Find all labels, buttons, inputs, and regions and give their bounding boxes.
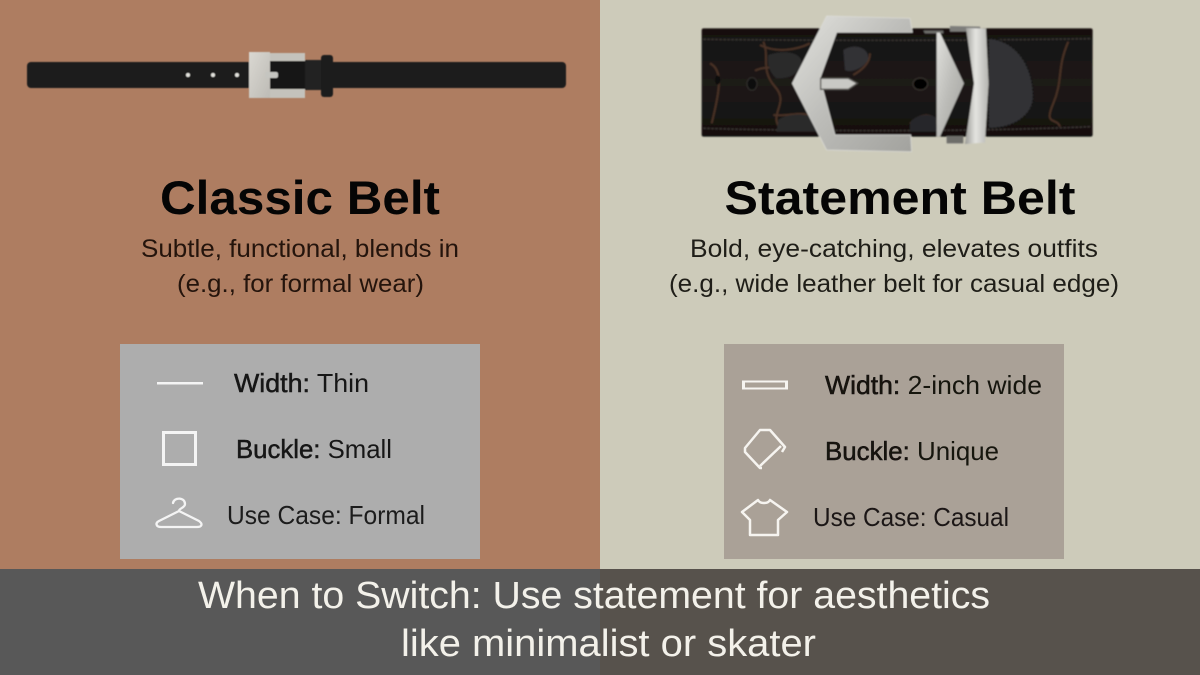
text: statement belt description: Bold, eye-catching, elevates outfits — [690, 235, 1098, 263]
text: when to switch: When to Switch: Use statement for aesthetics — [198, 575, 990, 617]
icon: thin line — [157, 382, 203, 384]
panel: classic belt attributes — [120, 344, 480, 559]
icon: wide bar — [744, 381, 786, 389]
text: statement belt description: (e.g., wide leather belt for casual edge) — [669, 270, 1119, 298]
text: statement belt description — [669, 235, 1119, 298]
panel: classic belt background — [0, 0, 600, 675]
text: use case casual: Use Case: Casual — [813, 502, 1009, 532]
icon: hanger — [157, 499, 201, 527]
text: buckle small: Buckle: Small — [236, 434, 392, 464]
icon: unique buckle — [745, 430, 785, 468]
icon: small square buckle — [164, 432, 196, 464]
heading: Statement Belt: Statement Belt — [724, 171, 1076, 224]
text: width 2-inch wide: Width: 2-inch wide — [825, 370, 1042, 400]
text: when to switch: like minimalist or skater — [401, 623, 816, 665]
text: when to switch — [198, 575, 990, 665]
panel: when to switch banner — [0, 569, 1200, 675]
classic belt illustration — [27, 52, 566, 98]
panel: statement belt background — [600, 0, 1200, 675]
icon: t-shirt — [742, 500, 787, 535]
text: use case formal: Use Case: Formal — [227, 500, 425, 530]
text: buckle unique: Buckle: Unique — [825, 436, 999, 466]
text: classic belt description: (e.g., for formal wear) — [177, 270, 424, 298]
text: width thin: Width: Thin — [234, 368, 369, 398]
heading: Classic Belt: Classic Belt — [160, 171, 440, 224]
statement belt illustration — [702, 16, 1093, 152]
panel: statement belt attributes — [724, 344, 1064, 559]
text: classic belt description: Subtle, functional, blends in — [141, 235, 459, 263]
text: classic belt description — [141, 235, 459, 298]
